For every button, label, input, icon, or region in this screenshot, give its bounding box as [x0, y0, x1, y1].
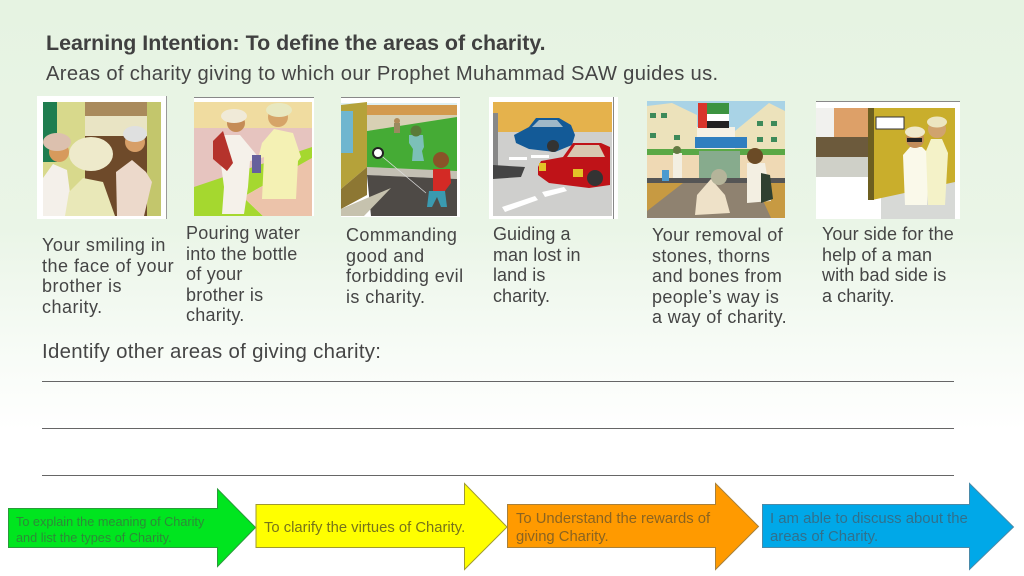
caption: removal of stones: a way of charity.: [652, 307, 787, 327]
caption: smiling: the face of your: [42, 256, 174, 276]
caption: pouring water: into the bottle: [186, 244, 298, 264]
arrow: clarify virtues: To clarify the virtues of Charity.: [264, 520, 465, 536]
caption: removal of stones: Your removal of: [652, 225, 783, 245]
caption: your side: a charity.: [822, 286, 894, 306]
caption: your side: with bad side is: [822, 265, 946, 285]
caption: your side: [822, 224, 954, 306]
caption: smiling: Your smiling in: [42, 235, 166, 255]
caption: removal of stones: people’s way is: [652, 286, 779, 306]
answer line 1: [42, 381, 954, 382]
caption: guiding a man: Guiding a: [493, 224, 571, 244]
arrow: understand rewards: giving Charity.: [516, 529, 609, 545]
arrow: discuss areas: [762, 482, 1014, 570]
illustration: helping boy with bad sight: [816, 101, 960, 219]
caption: pouring water: of your: [186, 264, 243, 284]
caption: commanding good: forbidding evil: [346, 266, 464, 286]
caption: your side: Your side for the: [822, 224, 954, 244]
answer line 2: [42, 428, 954, 429]
caption: smiling: brother is: [42, 276, 122, 296]
illustration: school and removal of stones: [647, 101, 785, 219]
caption: guiding a man: [493, 224, 581, 306]
caption: smiling: charity.: [42, 296, 103, 316]
illustration: football: [341, 97, 460, 217]
caption: pouring water: [186, 223, 300, 325]
illustration: smiling boys: [37, 96, 167, 219]
caption: commanding good: Commanding: [346, 225, 457, 245]
caption: guiding a man: charity.: [493, 286, 550, 306]
caption: your side: help of a man: [822, 244, 932, 264]
arrow: understand rewards: [507, 482, 760, 571]
caption: guiding a man: land is: [493, 265, 545, 285]
prompt: identify other areas: Identify other areas of giving charity:: [42, 341, 381, 363]
arrow: understand rewards: To Understand the rewards of: [516, 511, 711, 527]
illustration: pouring water: [194, 97, 314, 216]
caption: commanding good: is charity.: [346, 286, 425, 306]
caption: pouring water: charity.: [186, 305, 245, 325]
caption: pouring water: brother is: [186, 284, 263, 304]
caption: guiding a man: man lost in: [493, 244, 581, 264]
caption: removal of stones: stones, thorns: [652, 246, 770, 266]
caption: removal of stones: and bones from: [652, 266, 782, 286]
arrow: discuss areas: I am able to discuss about the: [770, 511, 968, 527]
arrow: explain meaning: To explain the meaning of Charity: [16, 515, 205, 529]
title: Learning Intention: To define the areas of charity.: [46, 31, 546, 55]
illustration: cars: [489, 97, 618, 219]
caption: commanding good: good and: [346, 246, 425, 266]
caption: pouring water: Pouring water: [186, 223, 300, 243]
arrow: explain meaning: [8, 488, 256, 568]
caption: commanding good: [346, 225, 464, 307]
arrow: discuss areas: areas of Charity.: [770, 529, 878, 545]
caption: smiling: [42, 235, 174, 317]
arrow: explain meaning: and list the types of Charity.: [16, 531, 172, 545]
arrow: clarify virtues: [256, 482, 507, 571]
subtitle: Areas of charity giving to which our Prophet Muhammad SAW guides us.: [46, 63, 718, 85]
answer line 3: [42, 475, 954, 476]
caption: removal of stones: [652, 225, 787, 327]
